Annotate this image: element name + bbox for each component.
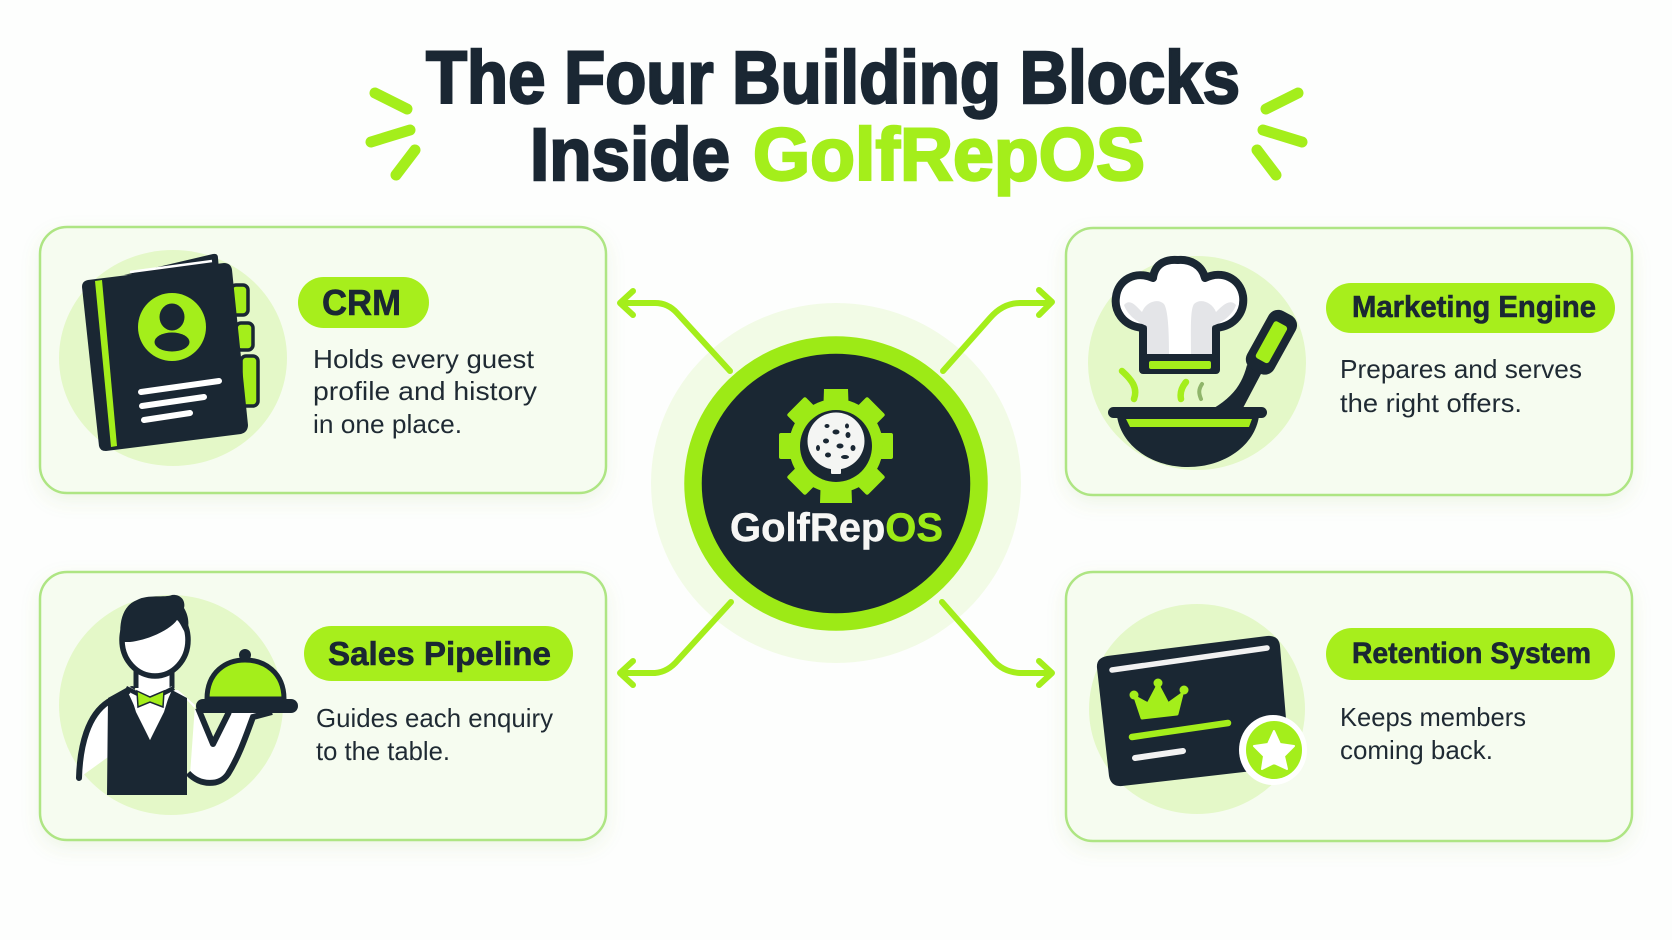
title: Inside bbox=[530, 113, 730, 196]
title: The Four Building Blocks bbox=[426, 36, 1240, 119]
label pill: Retention System: Retention System bbox=[1352, 637, 1591, 670]
text: Marketing description: Prepares and serves bbox=[1340, 354, 1582, 384]
text: CRM description bbox=[313, 344, 537, 439]
center halo bbox=[651, 303, 1021, 663]
text: Marketing description bbox=[1340, 354, 1582, 418]
arrow: to Marketing Engine bbox=[943, 290, 1052, 371]
text: Sales description bbox=[316, 703, 553, 766]
panel: Retention System bbox=[1066, 572, 1632, 841]
center hub bbox=[693, 345, 979, 622]
icon: membership card bbox=[1089, 604, 1307, 814]
icon: right sparkle bbox=[1257, 93, 1302, 175]
arrow: to CRM bbox=[620, 291, 730, 371]
arrow: to Sales Pipeline bbox=[620, 602, 731, 685]
label pill: Retention System bbox=[1326, 628, 1615, 680]
text: CRM description: in one place. bbox=[313, 409, 462, 439]
title: GolfRepOS bbox=[753, 113, 1145, 196]
icon: gear with golf ball bbox=[779, 389, 893, 503]
icon: chef hat and pan bbox=[1088, 256, 1306, 470]
icon: left sparkle bbox=[371, 93, 415, 175]
label pill: Marketing Engine bbox=[1326, 283, 1615, 333]
text: CRM description: Holds every guest bbox=[313, 344, 535, 374]
text: Retention description: Keeps members bbox=[1340, 702, 1526, 732]
text: CRM description: profile and history bbox=[313, 376, 537, 406]
label pill: Sales Pipeline: Sales Pipeline bbox=[328, 635, 551, 672]
text: Retention description: coming back. bbox=[1340, 735, 1493, 765]
text: Retention description bbox=[1340, 702, 1526, 765]
text: Sales description: Guides each enquiry bbox=[316, 703, 553, 733]
title bbox=[426, 36, 1240, 196]
panel: Marketing Engine bbox=[1066, 228, 1632, 495]
label pill: CRM bbox=[298, 277, 429, 328]
panel: Sales Pipeline bbox=[40, 572, 606, 840]
label pill: Marketing Engine: Marketing Engine bbox=[1352, 289, 1596, 324]
text: Sales description: to the table. bbox=[316, 736, 450, 766]
icon: address book bbox=[59, 250, 287, 466]
text: Marketing description: the right offers. bbox=[1340, 388, 1522, 418]
icon: waiter with cloche bbox=[59, 595, 298, 815]
label pill: Sales Pipeline bbox=[304, 626, 573, 681]
arrow: to Retention System bbox=[942, 602, 1052, 685]
panel: CRM bbox=[40, 227, 606, 493]
label pill: CRM: CRM bbox=[322, 282, 401, 323]
brand wordmark: GolfRepOS bbox=[730, 506, 943, 550]
